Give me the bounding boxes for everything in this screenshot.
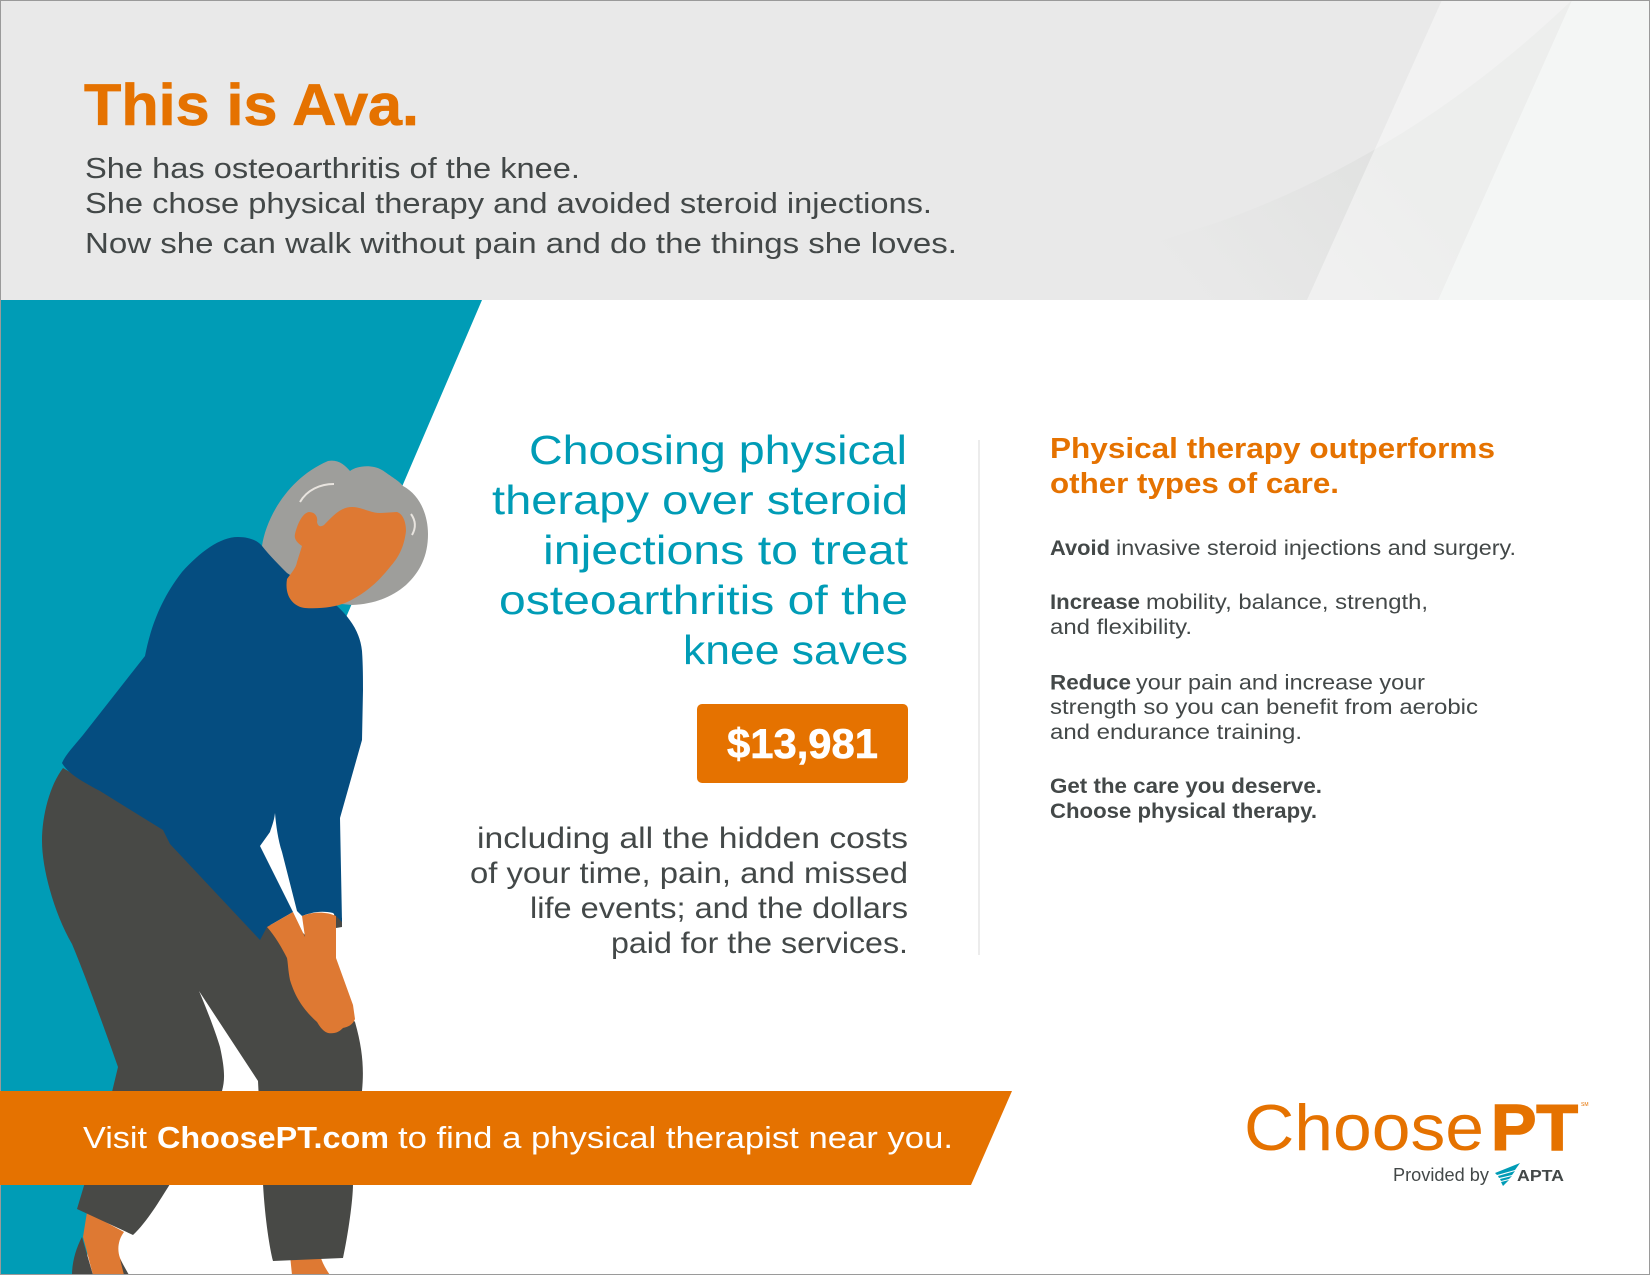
logo: ChoosePT provided by APTA bbox=[1244, 1091, 1588, 1186]
logo: ChoosePT provided by APTA: PT bbox=[1491, 1091, 1578, 1164]
savings callout bbox=[697, 704, 908, 783]
headline: choosing physical therapy saves: Choosing physical bbox=[529, 427, 907, 473]
illustration: Ava holding her knee bbox=[42, 461, 428, 1275]
orange banner bbox=[0, 1091, 1012, 1185]
headline: choosing physical therapy saves bbox=[492, 427, 909, 673]
hidden costs text: of your time, pain, and missed bbox=[470, 857, 908, 890]
title: This is Ava. bbox=[84, 73, 419, 138]
benefit: reduce: your pain and increase your bbox=[1136, 672, 1425, 694]
headline: choosing physical therapy saves: knee saves bbox=[683, 627, 908, 673]
right foot bbox=[290, 1255, 330, 1275]
banner text: to find a physical therapist near you. bbox=[398, 1120, 953, 1155]
right column heading: Physical therapy outperforms bbox=[1050, 433, 1495, 465]
intro text: She has osteoarthritis of the knee. bbox=[85, 153, 580, 185]
logo: ChoosePT provided by APTA: SM bbox=[1581, 1102, 1588, 1108]
teal diagonal panel bbox=[0, 300, 482, 1275]
hands on knee bbox=[267, 912, 355, 1033]
benefit: increase: Increase bbox=[1050, 591, 1140, 614]
benefit: increase: mobility, balance, strength, bbox=[1146, 591, 1428, 614]
head and face bbox=[286, 507, 406, 608]
hidden costs text: life events; and the dollars bbox=[530, 892, 908, 925]
headline: choosing physical therapy saves: injections to treat bbox=[543, 527, 909, 573]
banner text: ChoosePT.com bbox=[157, 1120, 389, 1155]
intro text: She chose physical therapy and avoided steroid injections. bbox=[85, 188, 932, 220]
icon: APTA wing bbox=[1495, 1163, 1520, 1186]
logo: ChoosePT provided by APTA: Choose bbox=[1244, 1091, 1484, 1164]
closing call to action: Choose physical therapy. bbox=[1050, 800, 1317, 823]
banner text bbox=[83, 1120, 953, 1155]
closing call to action: Get the care you deserve. bbox=[1050, 775, 1322, 798]
benefit: reduce: strength so you can benefit from aerobic bbox=[1050, 696, 1478, 719]
headline: choosing physical therapy saves: osteoarthritis of the bbox=[499, 577, 908, 623]
benefit: reduce: Reduce bbox=[1050, 672, 1131, 694]
cuff shadow bbox=[334, 914, 342, 928]
benefit: avoid: Avoid bbox=[1050, 537, 1110, 560]
savings callout: $13,981 bbox=[727, 720, 878, 767]
benefit: increase bbox=[1050, 591, 1428, 639]
benefit: reduce bbox=[1050, 672, 1478, 744]
benefit: reduce: and endurance training. bbox=[1050, 721, 1302, 744]
left foot and shoe bbox=[72, 1212, 129, 1275]
benefit: avoid: invasive steroid injections and surgery. bbox=[1116, 537, 1516, 560]
hidden costs text: including all the hidden costs bbox=[477, 822, 908, 855]
header panel bbox=[0, 0, 1650, 300]
right column heading: other types of care. bbox=[1050, 468, 1339, 500]
column divider bbox=[978, 440, 980, 955]
benefits list bbox=[1050, 537, 1516, 823]
banner text: Visit bbox=[83, 1120, 147, 1155]
trousers bbox=[42, 768, 363, 1261]
benefit: increase: and flexibility. bbox=[1050, 616, 1192, 639]
logo: ChoosePT provided by APTA: APTA bbox=[1517, 1168, 1564, 1185]
hidden costs text: paid for the services. bbox=[611, 927, 908, 960]
right column heading bbox=[1050, 433, 1495, 500]
hair bbox=[262, 461, 428, 605]
intro text: Now she can walk without pain and do the things she loves. bbox=[85, 228, 957, 260]
hidden costs text bbox=[470, 822, 908, 960]
closing call to action bbox=[1050, 775, 1322, 823]
intro text bbox=[85, 153, 957, 260]
logo: ChoosePT provided by APTA: Provided by bbox=[1393, 1165, 1489, 1185]
sweater bbox=[62, 537, 363, 940]
headline: choosing physical therapy saves: therapy over steroid bbox=[492, 477, 908, 523]
hair highlights bbox=[300, 484, 415, 535]
